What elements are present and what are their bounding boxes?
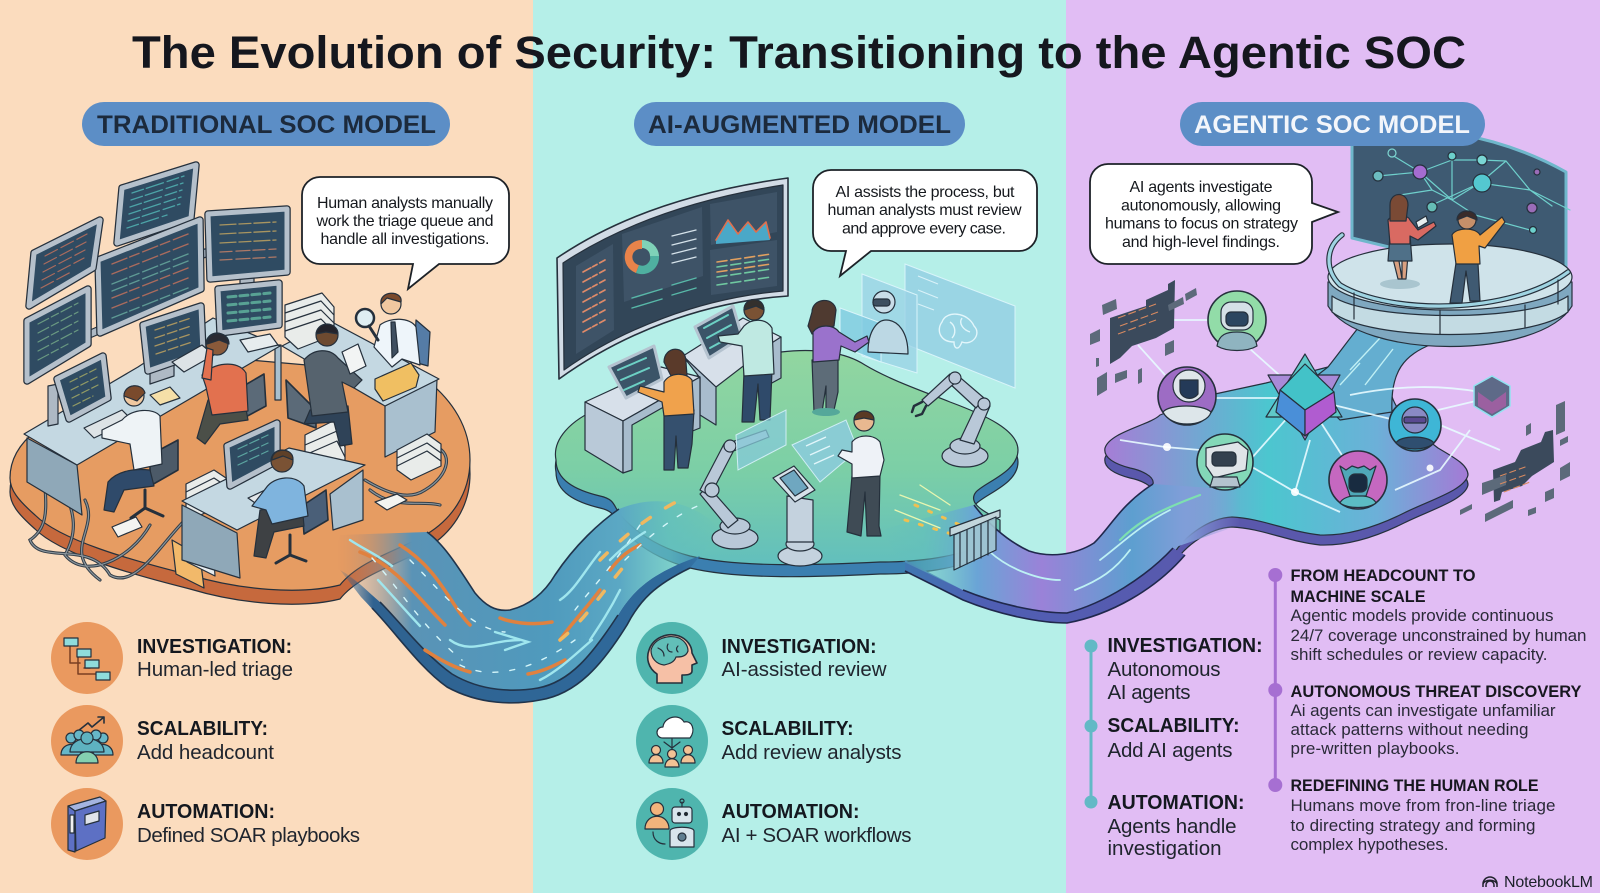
bottom desk: [182, 423, 365, 578]
network display wall: [1352, 128, 1570, 290]
takeaway: threat discovery: pre-written playbooks.: [1290, 739, 1460, 758]
icon: process tree: [51, 622, 123, 694]
person: analyst in orange: [197, 333, 266, 444]
paper stacks: [112, 293, 441, 588]
agentic attributes timeline: [1084, 635, 1262, 860]
heading: traditional SOC model: [82, 102, 450, 146]
text: automation: AUTOMATION:: [1108, 792, 1244, 814]
agent avatar: boxy bot: [1197, 434, 1253, 490]
text: automation: [722, 801, 912, 847]
takeaway: human role: [1290, 776, 1556, 854]
panel: agentic background: [1066, 0, 1600, 893]
agent avatar: horned agent: [1329, 451, 1387, 509]
text: automation: investigation: [1108, 837, 1222, 860]
person: man in teal shirt: [718, 300, 774, 422]
person: woman in purple: [808, 300, 869, 416]
monitor: lower right: [218, 283, 279, 333]
takeaway: threat discovery: AUTONOMOUS THREAT DISCOVERY: [1290, 682, 1582, 701]
text: investigation: Autonomous: [1108, 658, 1220, 681]
person: lead analyst with magnifier: [356, 293, 430, 367]
icon: team growth: [51, 705, 123, 777]
icon: playbook binder: [51, 788, 123, 860]
monitor wall: [27, 165, 287, 426]
monitor: big: [98, 220, 201, 333]
speech bubble: agentic: and high-level findings.: [1122, 234, 1280, 251]
text: scalability: Add review analysts: [722, 741, 902, 764]
keyboards and papers: [84, 334, 278, 438]
agent avatar: white android: [1158, 367, 1216, 425]
ramp to observation platform: [1305, 322, 1432, 420]
monitor: low left: [57, 356, 108, 419]
text: investigation: INVESTIGATION:: [1108, 635, 1262, 657]
person: man in white shirt: [838, 411, 884, 536]
text: scalability: SCALABILITY:: [1108, 715, 1240, 737]
text: automation: [137, 801, 360, 847]
wall display: curved dashboard: [557, 178, 788, 379]
heading: AI-augmented model: AI-AUGMENTED MODEL: [648, 111, 951, 139]
text: automation: AUTOMATION:: [722, 801, 860, 823]
traditional attributes: [51, 622, 360, 860]
icon: analyst and robot: [636, 788, 708, 860]
speech bubble: traditional: Human analysts manually: [317, 195, 493, 212]
monitor: left lower: [27, 289, 88, 381]
speech bubble: AI-augmented: human analysts must review: [828, 202, 1022, 219]
AI-augmented scene: [557, 178, 1015, 570]
takeaway: human role: REDEFINING THE HUMAN ROLE: [1290, 776, 1538, 795]
agentic takeaways timeline: [1268, 566, 1586, 854]
takeaway: machine scale: FROM HEADCOUNT TO: [1290, 566, 1476, 585]
railing: [1329, 235, 1568, 306]
data shards right: [1460, 401, 1570, 522]
text: investigation: AI agents: [1108, 681, 1190, 704]
firewall gate: [950, 510, 1000, 570]
heading: AI-augmented model: [634, 102, 965, 146]
holographic panels: [840, 264, 1015, 388]
robot arm: left: [700, 430, 769, 549]
kiosk terminal: [773, 466, 822, 566]
takeaway: threat discovery: [1290, 682, 1582, 758]
flow stream: AI-augmented to agentic: [880, 484, 1240, 623]
text: investigation: Human-led triage: [137, 658, 293, 681]
agentic scene: [1090, 128, 1572, 522]
takeaway: human role: complex hypotheses.: [1290, 835, 1448, 854]
person: woman in orange: [638, 349, 694, 470]
speech bubble: agentic: humans to focus on strategy: [1105, 216, 1298, 232]
text: automation: [1108, 792, 1244, 860]
text: scalability: Add headcount: [137, 741, 274, 764]
small data cube: [1474, 376, 1510, 417]
icon: cloud and reviewers: [636, 705, 708, 777]
flow stream: traditional to AI-augmented: [330, 500, 720, 703]
takeaway: human role: to directing strategy and forming: [1290, 816, 1536, 835]
text: investigation: [1108, 635, 1262, 704]
text: scalability: [722, 718, 902, 764]
monitor: right top: [208, 209, 287, 279]
speech bubble: AI-augmented: AI assists the process, but: [836, 184, 1015, 201]
robot head: [868, 291, 908, 354]
text: scalability: Add AI agents: [1108, 739, 1232, 762]
speech bubble: agentic: autonomously, allowing: [1121, 198, 1281, 214]
island: AI-augmented floor: [555, 351, 1018, 577]
robot arm: right: [912, 372, 990, 467]
speech bubble: agentic: AI agents investigate: [1130, 179, 1273, 196]
AI-augmented attributes: [636, 622, 912, 860]
speech bubble: AI-augmented: [813, 170, 1037, 276]
monitor: left upper: [29, 220, 100, 306]
island: traditional SOC: [10, 165, 470, 604]
text: investigation: INVESTIGATION:: [722, 636, 876, 658]
text: automation: Defined SOAR playbooks: [137, 824, 360, 847]
heading: agentic SOC model: AGENTIC SOC MODEL: [1194, 111, 1470, 139]
title: The Evolution of Security: Transitioning to the Agentic SOC: [132, 27, 1466, 78]
agent avatar: helmet robot: [1208, 291, 1266, 350]
takeaway line and nodes: [1268, 568, 1282, 792]
person: analyst in blue: [252, 450, 328, 563]
speech bubble: traditional: [302, 177, 509, 289]
NotebookLM watermark: NotebookLM: [1504, 874, 1593, 891]
monitor stands: [48, 248, 254, 426]
person: analyst in white shirt: [102, 386, 178, 518]
text: automation: AUTOMATION:: [137, 801, 275, 823]
desk: main long desk: [24, 318, 439, 515]
panel: AI-augmented background: [533, 0, 1066, 893]
cables: [30, 440, 446, 580]
speech bubble: traditional: handle all investigations.: [320, 231, 490, 248]
observation platform: [1328, 128, 1572, 346]
takeaway: machine scale: shift schedules or review capacity.: [1290, 645, 1548, 664]
person: woman with tablet: [1380, 194, 1436, 289]
speech bubble: AI-augmented: and approve every case.: [842, 220, 1006, 238]
person: analyst in dark jacket: [286, 324, 366, 446]
text: automation: Agents handle: [1108, 815, 1236, 838]
monitor: centre: [143, 306, 203, 371]
text: scalability: SCALABILITY:: [722, 718, 854, 740]
speech bubble: traditional: work the triage queue and: [316, 213, 494, 230]
takeaway: machine scale: 24/7 coverage unconstrained by human: [1290, 626, 1586, 645]
workstation desks: [585, 306, 781, 473]
stream particles: [372, 505, 700, 672]
text: scalability: SCALABILITY:: [137, 718, 268, 740]
heading: agentic SOC model: [1180, 102, 1485, 146]
person: man pointing: [1450, 211, 1505, 303]
timeline line and nodes: [1084, 640, 1098, 808]
crystal core: [1266, 354, 1342, 440]
data shards left: [1090, 280, 1197, 396]
icon: head with brain: [636, 622, 708, 694]
takeaway: human role: Humans move from fron-line triage: [1290, 796, 1556, 815]
text: scalability: [1108, 715, 1240, 762]
text: investigation: AI-assisted review: [722, 658, 887, 681]
heading: traditional SOC model: TRADITIONAL SOC MODEL: [97, 111, 436, 139]
floating tablets: [736, 410, 858, 482]
text: investigation: INVESTIGATION:: [137, 636, 292, 658]
monitor: top: [117, 165, 196, 243]
takeaway: threat discovery: Ai agents can investigate unfamiliar: [1290, 701, 1556, 720]
agent avatar: visor person: [1389, 399, 1441, 451]
speech bubble: agentic: [1090, 164, 1338, 264]
text: automation: AI + SOAR workflows: [722, 824, 912, 847]
text: investigation: [137, 636, 293, 681]
takeaway: machine scale: MACHINE SCALE: [1290, 587, 1426, 606]
island: agentic floor: [1105, 367, 1468, 565]
takeaway: machine scale: Agentic models provide continuous: [1290, 606, 1554, 625]
text: scalability: [137, 718, 274, 764]
takeaway: threat discovery: attack patterns without needing: [1290, 720, 1528, 739]
takeaway: machine scale: [1290, 566, 1586, 664]
panel: traditional background: [0, 0, 533, 893]
text: investigation: [722, 636, 887, 681]
network links: [1120, 320, 1500, 512]
brain hologram: [939, 314, 977, 348]
